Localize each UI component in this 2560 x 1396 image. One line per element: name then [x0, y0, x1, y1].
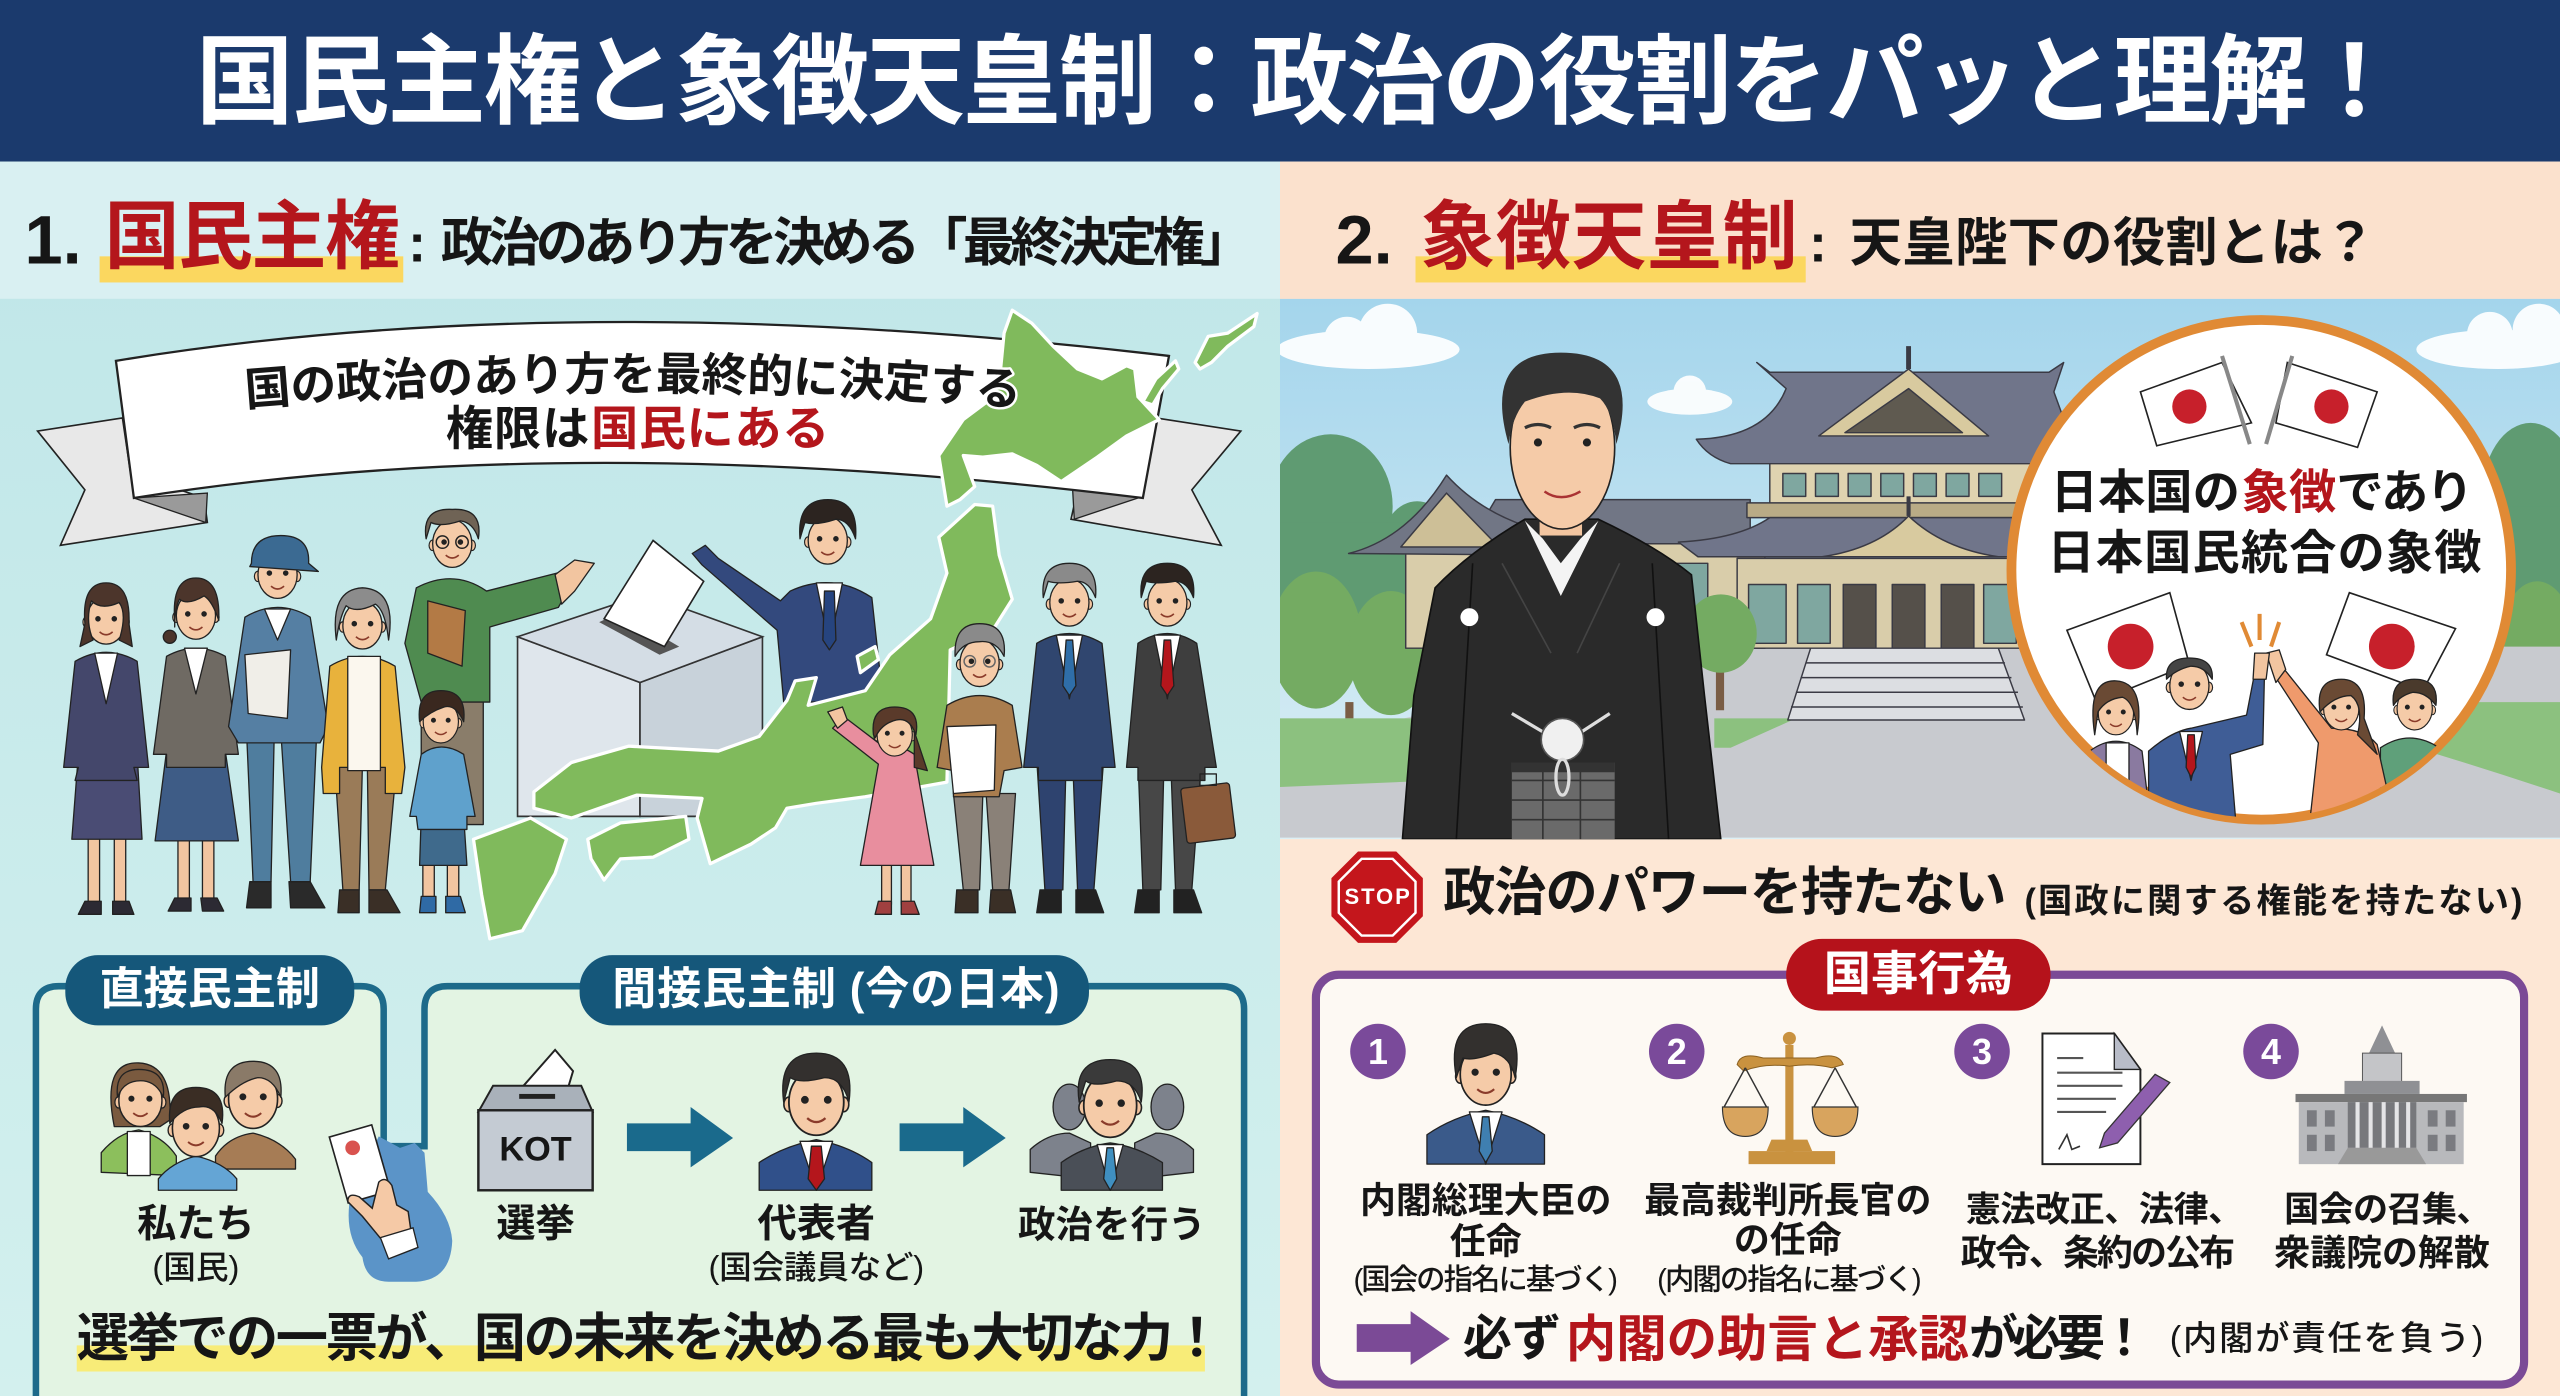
map: Shikoku [588, 816, 689, 880]
person: worker with cap and clipboard [229, 536, 328, 908]
label: election: 選挙 [496, 1203, 575, 1246]
ribbon text: 国民にある [591, 403, 829, 456]
map: Sado island [857, 647, 878, 673]
heading: 1 popular sovereignty [0, 162, 1280, 299]
heading: 2 symbolic emperor: 天皇陛下の役割とは？ [1850, 214, 2376, 272]
text: chief justice appointment [1644, 1180, 1931, 1297]
badge 1: 1 [1368, 1031, 1388, 1072]
badge 2: 2 [1667, 1031, 1687, 1072]
note: cabinet advice and approval required: 必ず [1463, 1312, 1561, 1366]
text: symbol of the state: 日本国の [2051, 467, 2240, 520]
label: representative: (国会議員など) [709, 1249, 924, 1286]
ribbon text: 国の政治のあり方を最終的に決定する [246, 351, 1018, 410]
pill: acts in matters of state [1786, 939, 2051, 1011]
text: convocation and dissolution: 国会の召集、 [2284, 1190, 2491, 1229]
scene: palace and emperor [1269, 299, 2560, 839]
item 1: prime minister appointment [1350, 1024, 1618, 1297]
text: symbol of the state: であり [2336, 467, 2473, 520]
palace: middle roof [1678, 518, 2024, 557]
icon: scales of justice [1722, 1032, 1858, 1164]
palace: second floor [1746, 464, 2030, 518]
palace [1349, 346, 2122, 720]
trees [1280, 422, 2560, 614]
tree by the steps [1696, 594, 1757, 710]
text: symbol of the state: 象徴 [2242, 467, 2336, 520]
palace: upper roof [1696, 346, 2064, 464]
text: prime minister appointment: 内閣総理大臣の [1360, 1180, 1611, 1221]
text: prime minister appointment: 任命 [1450, 1220, 1522, 1261]
notice: no political power: (国政に関する権能を持たない) [2024, 882, 2522, 920]
badge 3 [1954, 1024, 2010, 1079]
person: older woman in yellow cardigan [322, 588, 405, 913]
person: man in suit casting ballot [692, 500, 883, 702]
label: govern: 政治を行う [1018, 1204, 1206, 1246]
text: chief justice appointment: 最高裁判所長官の [1644, 1180, 1931, 1221]
person: woman in grey jacket [153, 578, 238, 911]
palace: steps [1788, 648, 2024, 720]
note: cabinet advice and approval required: 内閣の助言と承認 [1566, 1310, 1969, 1367]
panel: 1 popular sovereignty [0, 162, 1280, 1396]
icon: government group [1030, 1060, 1193, 1190]
pill: acts in matters of state: 国事行為 [1824, 948, 2013, 1001]
item 3: promulgation [1954, 1024, 2243, 1273]
palace: left wing [1349, 475, 1765, 648]
person: girl in pink dress [828, 707, 934, 914]
person: boy in blue hoodie [410, 691, 475, 913]
arrow: election to representative [627, 1107, 733, 1167]
map: Japan [473, 310, 1257, 939]
text: symbol of the state: 日本国民統合の象徴 [2047, 527, 2482, 580]
badge 3: 3 [1972, 1031, 1992, 1072]
person: man in green sweater with book [405, 509, 594, 825]
palace: ground floor [1737, 558, 2024, 648]
badge 1 [1350, 1024, 1406, 1079]
title banner [0, 0, 2560, 162]
ribbon text [246, 351, 1018, 456]
text: promulgation: 憲法改正、法律、 [1966, 1190, 2243, 1229]
panel: direct and indirect democracy [36, 955, 1244, 1396]
ground [1280, 647, 2560, 838]
map: Hokkaido [939, 310, 1159, 506]
icon: hand pressing card [329, 1125, 452, 1282]
note: cabinet advice and approval required [1463, 1310, 2483, 1367]
note: cabinet advice and approval required: が必要！ [1969, 1312, 2149, 1366]
heading: 2 symbolic emperor: 2. [1336, 202, 1393, 279]
text: promulgation: 政令、条約の公布 [1961, 1232, 2235, 1273]
icon: ballot box KOT: KOT [499, 1130, 572, 1168]
icon: citizens trio [101, 1061, 296, 1190]
icon: stop sign: STOP [1344, 884, 1410, 909]
person: man in blue suit [1024, 563, 1115, 913]
panel: 2 symbolic emperor [1269, 162, 2560, 1396]
title banner: 国民主権と象徴天皇制：政治の役割をパッと理解！ [196, 27, 2403, 137]
icon: representative [759, 1053, 872, 1190]
map: Kyushu [473, 818, 567, 939]
text: convocation and dissolution: 衆議院の解散 [2274, 1232, 2490, 1273]
notice: no political power [1332, 852, 2522, 942]
key message: 選挙での一票が、国の未来を決める最も大切な力！ [77, 1310, 1223, 1368]
text: chief justice appointment: の任命 [1734, 1219, 1842, 1260]
icon: bottom flags and cheering people [2067, 593, 2456, 833]
label: representative: 代表者 [758, 1203, 875, 1246]
icon: stop sign [1332, 852, 1422, 942]
pill: direct democracy: 直接民主制 [100, 965, 320, 1014]
icon: document and pen [2042, 1034, 2170, 1164]
heading: 1 popular sovereignty: : [408, 213, 426, 273]
text: chief justice appointment: (内閣の指名に基づく) [1657, 1264, 1922, 1297]
ribbon text: 権限は [446, 403, 589, 456]
callout: symbol of Japan circle [2011, 320, 2511, 833]
badge 4: 4 [2261, 1031, 2281, 1072]
badge 2 [1649, 1024, 1704, 1079]
icon: prime minister [1427, 1024, 1544, 1164]
icon: national diet building [2296, 1025, 2467, 1164]
map: Kuril islands [1143, 313, 1257, 405]
icon: ballot box KOT [478, 1050, 593, 1190]
icon: briefcase [1180, 774, 1236, 844]
pill: indirect democracy [580, 955, 1089, 1025]
item 2: chief justice appointment [1644, 1024, 1931, 1297]
person: elderly man in brown vest [937, 624, 1022, 913]
label: citizens [137, 1203, 255, 1286]
text: convocation and dissolution [2274, 1190, 2491, 1273]
heading: 1 popular sovereignty: 政治のあり方を決める「最終決定権」 [441, 214, 1252, 272]
person: man in dark suit with briefcase [1127, 563, 1236, 913]
pill: indirect democracy: 間接民主制 (今の日本) [612, 965, 1060, 1014]
badge 4 [2243, 1024, 2299, 1079]
panel: acts in matters of state [1316, 939, 2524, 1385]
text: promulgation [1961, 1190, 2243, 1273]
text: prime minister appointment: (国会の指名に基づく) [1353, 1264, 1618, 1297]
icon: top flags [2140, 356, 2377, 447]
heading: 2 symbolic emperor: : [1809, 213, 1827, 273]
heading: 1 popular sovereignty: 国民主権 [104, 195, 400, 279]
notice: no political power: 政治のパワーを持たない [1443, 864, 2007, 922]
note: cabinet advice and approval required: (内閣が責任を負う) [2170, 1320, 2483, 1358]
label: citizens: 私たち [137, 1203, 255, 1246]
emperor figure [1402, 353, 1721, 839]
arrow: representative to government [900, 1107, 1006, 1167]
text: symbol of the state [2047, 467, 2482, 580]
arrow: advice and approval [1357, 1311, 1450, 1365]
item 4: convocation and dissolution [2243, 1024, 2491, 1273]
heading: 2 symbolic emperor [1280, 162, 2560, 299]
heading: 2 symbolic emperor: 象徴天皇制 [1420, 195, 1798, 279]
illustration: ballot box [518, 540, 762, 816]
pill: direct democracy [65, 955, 354, 1025]
label: citizens: (国民) [152, 1249, 239, 1286]
person: woman in navy suit [64, 583, 149, 914]
ribbon banner [38, 322, 1241, 545]
clouds [1277, 304, 2560, 415]
text: prime minister appointment [1353, 1180, 1618, 1297]
map: Honshu [534, 505, 1012, 864]
heading: 1 popular sovereignty: 1. [24, 202, 82, 279]
label: representative [709, 1203, 924, 1286]
